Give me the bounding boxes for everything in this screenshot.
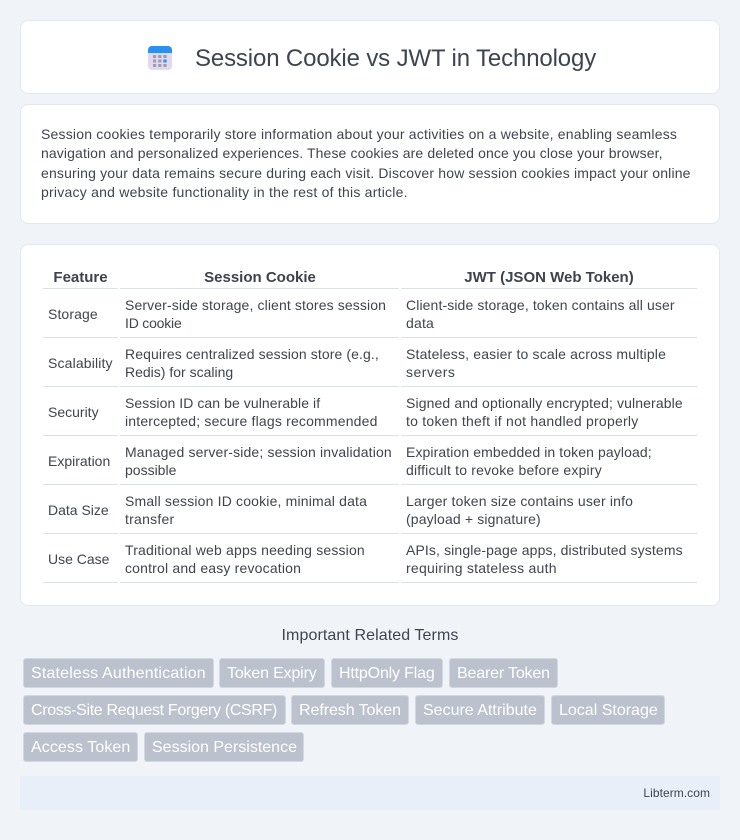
intro text bbox=[41, 126, 691, 200]
row: Scalability bbox=[48, 346, 666, 380]
row: Data Size: Small session ID cookie, minimal data bbox=[125, 493, 367, 509]
tag bbox=[219, 658, 325, 688]
tag: Bearer Token bbox=[457, 665, 550, 682]
comparison table panel bbox=[20, 244, 720, 606]
row: Data Size: (payload + signature) bbox=[406, 511, 541, 527]
row: Use Case: APIs, single-page apps, distributed systems bbox=[406, 542, 683, 558]
tag: Access Token bbox=[31, 739, 130, 756]
row: Expiration: Expiration embedded in token payload; bbox=[406, 444, 652, 460]
row: Security: Security bbox=[48, 404, 99, 420]
intro text: Session cookies temporarily store information about your activities on a website, enabling seamless bbox=[41, 126, 677, 142]
row: Scalability: Stateless, easier to scale across multiple bbox=[406, 346, 666, 362]
tag bbox=[291, 695, 409, 725]
row: Use Case: Traditional web apps needing session bbox=[125, 542, 365, 558]
row: Security: Session ID can be vulnerable if bbox=[125, 395, 320, 411]
row: Expiration: Expiration bbox=[48, 453, 110, 469]
row: Storage: Storage bbox=[48, 306, 98, 322]
row: Expiration: difficult to revoke before expiry bbox=[406, 462, 602, 478]
tag: Stateless Authentication bbox=[31, 665, 206, 682]
row: Use Case: requiring stateless auth bbox=[406, 560, 557, 576]
tag: Token Expiry bbox=[227, 665, 317, 682]
row: Data Size: Larger token size contains user info bbox=[406, 493, 633, 509]
tag bbox=[23, 732, 138, 762]
header panel bbox=[20, 20, 720, 94]
tag bbox=[23, 658, 214, 688]
row: Scalability: Requires centralized session store (e.g., bbox=[125, 346, 379, 362]
row: Data Size: transfer bbox=[125, 511, 174, 527]
tag list bbox=[23, 658, 665, 762]
tag: Session Persistence bbox=[152, 739, 297, 756]
row: Scalability: Redis) for scaling bbox=[125, 364, 233, 380]
row: Use Case: Use Case bbox=[48, 551, 109, 567]
intro text: ensuring your data remains secure during each visit. Discover how session cookies impact your online bbox=[41, 165, 691, 181]
row: Security: intercepted; secure flags recommended bbox=[125, 413, 378, 429]
row: Storage: Client-side storage, token contains all user bbox=[406, 297, 675, 313]
row: Security bbox=[48, 395, 683, 429]
tag bbox=[23, 695, 286, 725]
tag bbox=[551, 695, 665, 725]
intro text: navigation and personalized experiences. These cookies are deleted once you close your browser, bbox=[41, 145, 663, 161]
table header: JWT (JSON Web Token) bbox=[464, 269, 634, 286]
row: Security: to token theft if not handled properly bbox=[406, 413, 638, 429]
row: Security: Signed and optionally encrypted; vulnerable bbox=[406, 395, 683, 411]
row: Data Size bbox=[48, 493, 633, 527]
intro panel bbox=[20, 104, 720, 224]
tag bbox=[449, 658, 558, 688]
intro text: privacy and website functionality in the rest of this article. bbox=[41, 184, 408, 200]
row: Storage: Server-side storage, client stores session bbox=[125, 297, 386, 313]
footer bar bbox=[20, 776, 720, 810]
tag: Refresh Token bbox=[299, 702, 401, 719]
row: Storage bbox=[48, 297, 675, 331]
table header: Session Cookie bbox=[204, 269, 316, 286]
row: Storage: data bbox=[406, 315, 434, 331]
row: Scalability: Scalability bbox=[48, 355, 113, 371]
table header: Feature bbox=[53, 269, 108, 286]
tag: HttpOnly Flag bbox=[339, 665, 435, 682]
row: Expiration: Managed server-side; session invalidation bbox=[125, 444, 392, 460]
tag: Local Storage bbox=[559, 702, 658, 719]
row: Scalability: servers bbox=[406, 364, 455, 380]
related terms heading: Important Related Terms bbox=[282, 627, 458, 644]
row: Data Size: Data Size bbox=[48, 502, 109, 518]
row: Use Case: control and easy revocation bbox=[125, 560, 301, 576]
tag bbox=[331, 658, 443, 688]
title: Session Cookie vs JWT in Technology bbox=[195, 45, 596, 72]
row: Use Case bbox=[48, 542, 683, 576]
tag bbox=[144, 732, 304, 762]
row: Expiration: possible bbox=[125, 462, 176, 478]
footer credit: Libterm.com bbox=[643, 786, 710, 800]
icon: calendar bbox=[148, 46, 172, 70]
row: Expiration bbox=[48, 444, 652, 478]
tag: Cross-Site Request Forgery (CSRF) bbox=[31, 702, 277, 719]
tag: Secure Attribute bbox=[423, 702, 537, 719]
row: Storage: ID cookie bbox=[125, 315, 182, 331]
table header bbox=[53, 269, 634, 286]
tag bbox=[415, 695, 545, 725]
